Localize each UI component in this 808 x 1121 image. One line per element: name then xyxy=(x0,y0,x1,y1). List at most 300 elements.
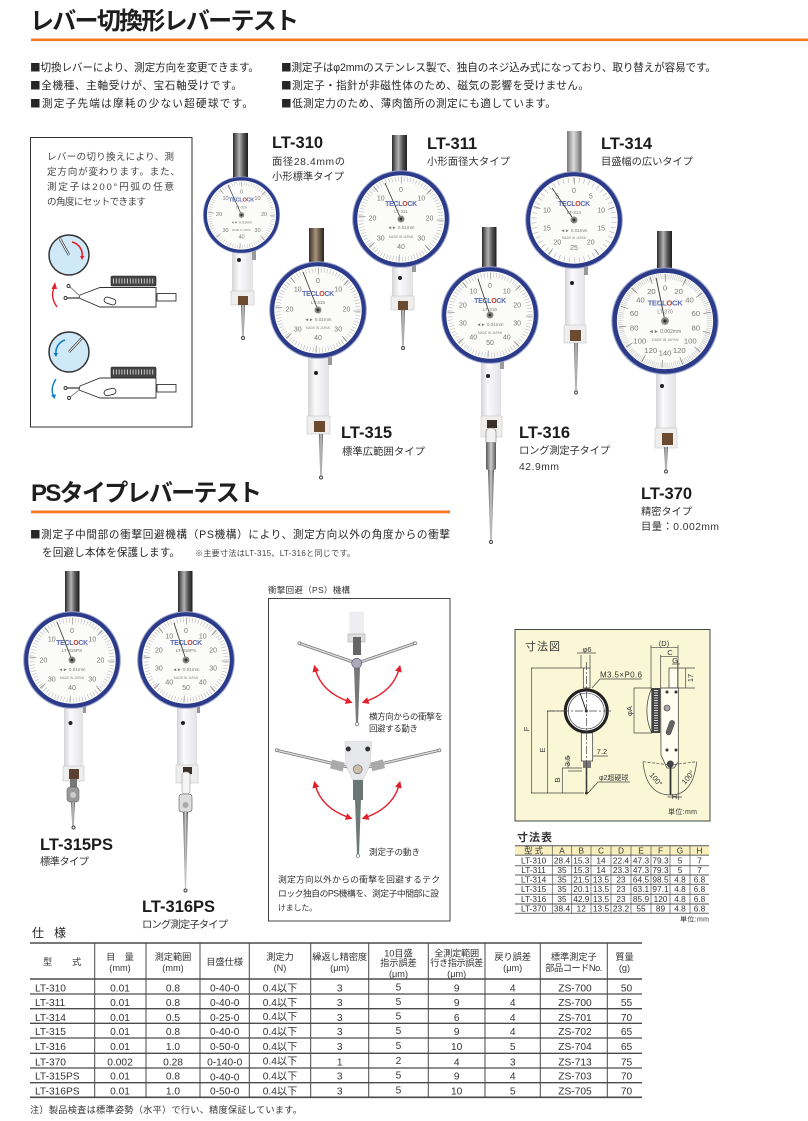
table rows: 0.4以下 xyxy=(263,1072,297,1082)
label: LT-314: LT-314 xyxy=(601,135,653,153)
gauge: LT-315: 10 xyxy=(334,286,342,293)
table: dimensions: 23 xyxy=(616,884,626,894)
drawing: front view: 7.2 xyxy=(597,747,607,756)
table: dimensions: 6.8 xyxy=(694,884,706,894)
gauge: LT-316PS: 20 xyxy=(155,648,163,655)
table: dimensions: 4.8 xyxy=(674,903,686,913)
table: dimensions: 型 式 xyxy=(524,846,544,856)
table rows: 5 xyxy=(396,1086,402,1096)
gauge: LT-370: 20 xyxy=(647,287,656,296)
gauge: LT-314: 25 xyxy=(570,245,578,252)
table rows: 1 xyxy=(337,1058,343,1068)
icon: side view gauge with upward lever xyxy=(52,276,176,307)
gauge: LT-316: 0 xyxy=(488,283,492,290)
gauge: LT-311: 40 xyxy=(397,244,405,251)
gauge: LT-316: 40 xyxy=(469,335,477,342)
table rows: 3 xyxy=(337,1027,343,1038)
table: dimensions: 47.3 xyxy=(633,865,649,875)
table: dimensions: 23.3 xyxy=(613,865,629,875)
table: dimensions: G xyxy=(677,846,683,856)
label: LT-316: LT-316 xyxy=(519,424,570,442)
table header: (mm) xyxy=(162,963,184,973)
gauge: LT-315PS: 30 xyxy=(88,677,96,684)
drawing: front view: E xyxy=(538,747,547,753)
table rows: 3 xyxy=(510,1058,516,1068)
table rows: 4 xyxy=(510,984,516,994)
gauge: LT-311: 0 xyxy=(399,187,403,194)
table rows: 0.5 xyxy=(166,1013,180,1024)
table rows: 0.8 xyxy=(166,1027,180,1038)
heading: PS type lever test: PSタイプレバーテスト xyxy=(31,480,262,507)
label: LT-315 xyxy=(341,424,426,458)
gauge: LT-311: MADE IN JAPAN xyxy=(389,235,414,239)
label: LT-310: 小形標準タイプ xyxy=(272,170,345,183)
table: dimensions: 89 xyxy=(656,903,665,913)
gauge: LT-311: TECLOCK xyxy=(385,201,417,208)
unit note: 単位:mm xyxy=(680,914,709,924)
table header: 指示誤差 xyxy=(380,957,417,968)
gauge: LT-316: 30 xyxy=(513,320,521,327)
gauge: LT-316: TECLOCK xyxy=(474,298,506,305)
gauge: LT-370: LT-370 xyxy=(657,309,673,315)
table rows: 0-140-0 xyxy=(207,1058,243,1068)
table header: 10目盛 xyxy=(384,948,413,958)
gauge: LT-311: 20 xyxy=(369,216,376,222)
feature bullets: ■測定子先端は摩耗の少ない超硬球です。 xyxy=(30,96,253,111)
icon: side view gauge with downward lever xyxy=(51,367,176,400)
table rows: 6 xyxy=(454,1013,460,1024)
table: dimensions: 4.8 xyxy=(674,894,686,904)
table rows: 0.01 xyxy=(110,1013,130,1024)
table rows: 0.002 xyxy=(107,1058,133,1068)
table: dimensions: F xyxy=(658,846,663,856)
table: dimensions: 7 xyxy=(697,865,702,875)
gauge: LT-370: 0 xyxy=(663,284,667,293)
table rows: 70 xyxy=(621,1072,632,1082)
drawing: side view: 100° xyxy=(647,771,664,788)
table rows: ZS-713 xyxy=(558,1058,592,1068)
table rows: 0.01 xyxy=(110,1042,130,1053)
gauge: LT-316PS: ◄► 0.01mm xyxy=(173,667,200,672)
gauge: LT-314: 20 xyxy=(587,240,595,247)
table: dimensions: 5 xyxy=(678,855,683,865)
table rows: 5 xyxy=(396,1012,402,1022)
table: dimensions: 47.3 xyxy=(633,855,649,865)
gauge: LT-310: 10 xyxy=(222,196,229,202)
table: dimensions: 4.8 xyxy=(674,884,686,894)
gauge: LT-316PS: LT-316PS xyxy=(176,648,196,653)
table rows: 50 xyxy=(621,984,632,994)
table rows: 9 xyxy=(454,984,460,994)
gauge: LT-310: 30 xyxy=(254,228,261,234)
table rows: 55 xyxy=(621,998,632,1009)
table: dimensions: 97.1 xyxy=(652,884,669,894)
panel text: 定方向が変わります。また、 xyxy=(47,166,180,178)
text: PS mechanism description: 測定方向以外からの衝撃を回避するテク xyxy=(278,874,440,884)
gauge: LT-370: 120 xyxy=(644,346,657,355)
drawing: front view: 3.5 xyxy=(563,756,572,766)
gauge: LT-314: 10 xyxy=(597,208,605,215)
gauge: LT-316: 10 xyxy=(469,288,477,295)
gauge: LT-311: ◄► 0.01mm xyxy=(388,225,415,230)
gauge: LT-316: 10 xyxy=(503,288,511,295)
table rows: LT-311 xyxy=(35,998,66,1009)
gauge: LT-370: 60 xyxy=(630,309,638,318)
drawing: side view: 100° xyxy=(680,769,697,786)
table: dimensions: B xyxy=(579,846,585,856)
gauge: LT-315PS: TECLOCK xyxy=(56,640,88,647)
gauge: LT-370: ◄► 0.002mm xyxy=(649,329,681,335)
drawing: side view xyxy=(625,639,697,801)
table rows: 0-40-0 xyxy=(210,998,240,1009)
gauge: LT-315PS: 10 xyxy=(48,636,56,643)
table: dimensions: 14 xyxy=(596,855,606,865)
gauge: LT-310: LT-310 xyxy=(236,206,247,210)
label: LT-370: LT-370 xyxy=(641,485,692,503)
table rows: 3 xyxy=(337,1013,343,1024)
gauge: LT-370 xyxy=(612,231,718,473)
label: LT-316: ロング測定子タイプ xyxy=(519,444,611,457)
title: lever type test indicator: レバー切換形レバーテスト xyxy=(30,8,299,35)
gauge: LT-315: 30 xyxy=(334,327,342,334)
table rows: 5 xyxy=(396,982,402,994)
gauge: LT-310: MADE IN JAPAN xyxy=(232,229,251,232)
gauge: LT-315: 20 xyxy=(286,306,293,314)
gauge: LT-311: LT-311 xyxy=(394,209,408,214)
gauge: LT-314: 5 xyxy=(589,193,593,200)
table rows: 3 xyxy=(337,1072,343,1082)
table rows: 75 xyxy=(621,1058,632,1068)
table rows: 65 xyxy=(621,1042,632,1053)
table: dimensions: 13.5 xyxy=(593,874,609,884)
gauge: LT-310: 20 xyxy=(261,212,267,218)
table header xyxy=(43,948,634,979)
table rows: 0-40-0 xyxy=(210,984,240,994)
caption: PS mechanism: 衝撃回避（PS）機構 xyxy=(268,585,350,595)
table rows: 70 xyxy=(621,1013,632,1024)
table: dimensions: 22.4 xyxy=(613,855,629,865)
text: lateral impact caption: 横方向からの衝撃を xyxy=(369,712,443,722)
gauge: LT-316 xyxy=(442,227,538,544)
table rows: 0.01 xyxy=(110,1072,130,1082)
heading: dimension table: 寸法表 xyxy=(517,830,552,844)
table rows: LT-310 xyxy=(35,984,66,994)
drawing: side view: 17 xyxy=(686,674,695,682)
table header: 質量 xyxy=(615,951,634,962)
table rows: 0.8 xyxy=(166,998,180,1009)
label: LT-316 xyxy=(519,424,611,473)
label: LT-315PS xyxy=(40,836,113,868)
table: dimensions: 13.5 xyxy=(593,894,609,904)
table: dimensions: 4.8 xyxy=(674,874,686,884)
drawing: side view: G xyxy=(672,656,678,665)
label: LT-315: LT-315 xyxy=(341,424,392,442)
gauge: LT-370: 140 xyxy=(659,348,671,357)
table rows: 70 xyxy=(621,1086,632,1098)
heading: specifications: 仕 様 xyxy=(32,926,66,940)
table rows: LT-315PS xyxy=(35,1072,80,1082)
table rows: 3 xyxy=(337,984,343,994)
table: dimensions: 12 xyxy=(577,903,586,913)
table rows: 5 xyxy=(510,1042,516,1053)
table rows: 0-25-0 xyxy=(210,1013,240,1024)
gauge: LT-370: 80 xyxy=(630,324,638,333)
gauge: LT-370: TECLOCK xyxy=(648,299,683,308)
gauge: LT-314: TECLOCK xyxy=(558,201,590,208)
gauge: LT-316PS: 20 xyxy=(209,648,217,655)
label: LT-370: 精密タイプ xyxy=(641,505,693,518)
drawing: side view: C xyxy=(667,648,673,657)
panel text: 測定子は200°円弧の任意 xyxy=(47,181,174,193)
table header: (μm) xyxy=(330,963,349,973)
table rows: ZS-700 xyxy=(558,984,592,994)
table header: 行き指示誤差 xyxy=(430,957,483,968)
table: dimensions: 120 xyxy=(654,894,668,904)
table header: 測定範囲 xyxy=(155,951,191,962)
gauge: LT-310: 10 xyxy=(254,196,261,202)
drawing: front view: F xyxy=(522,726,531,731)
table rows: 0-40-0 xyxy=(210,1072,240,1084)
table: dimensions: 5 xyxy=(678,865,683,875)
footnote: 注）製品検査は標準姿勢（水平）で行い、精度保証しています。 xyxy=(30,1104,302,1115)
table: dimensions xyxy=(515,846,709,913)
gauge: LT-314: 15 xyxy=(597,225,605,232)
drawing: side view: H xyxy=(672,792,677,801)
text: lateral impact caption: 回避する動き xyxy=(369,724,418,734)
table: dimensions: 79.3 xyxy=(652,855,669,865)
table rows: 0-50-0 xyxy=(210,1042,240,1053)
feature bullets: ■全機種、主軸受けが、宝石軸受けです。 xyxy=(30,78,242,93)
table rows: 0.01 xyxy=(110,998,130,1009)
table: dimensions: 85.9 xyxy=(633,894,649,904)
text: lateral impact caption xyxy=(369,712,443,734)
table: dimensions: D xyxy=(618,846,624,856)
table: dimensions: H xyxy=(696,846,702,856)
table header: 戻り誤差 xyxy=(494,951,531,962)
icon: dial counter-clockwise xyxy=(49,332,89,372)
table rows: 4 xyxy=(510,998,516,1009)
table: dimensions: 6.8 xyxy=(694,874,706,884)
unit note: 単位:mm xyxy=(668,807,697,816)
gauge: LT-314: MADE IN JAPAN xyxy=(562,236,587,240)
table rows: ZS-701 xyxy=(558,1013,592,1024)
table: dimensions: LT-370 xyxy=(521,903,547,913)
label: LT-370: 目量：0.002mm xyxy=(641,521,719,533)
table rows: 10 xyxy=(451,1086,463,1098)
table rows: 0.4以下 xyxy=(263,1086,297,1098)
table header: (μm) xyxy=(389,969,408,979)
table rows: 1.0 xyxy=(166,1042,180,1053)
gauge: LT-316PS: 30 xyxy=(155,665,163,672)
table: dimensions: 23 xyxy=(616,894,626,904)
gauge: LT-315: 0 xyxy=(316,278,320,285)
table rows: 0.4以下 xyxy=(263,1027,297,1038)
PS feature text: ※主要寸法はLT-315、LT-316と同じです。 xyxy=(195,548,355,558)
gauge: LT-315PS: 30 xyxy=(48,677,56,684)
panel text xyxy=(47,151,180,208)
gauge: LT-316: LT-316 xyxy=(483,307,497,312)
PS feature text: を回避し本体を保護します。 xyxy=(42,546,180,559)
table rows: LT-370 xyxy=(35,1058,66,1068)
table: dimensions: A xyxy=(559,846,565,856)
gauge: LT-311: 30 xyxy=(377,236,385,243)
table: dimensions: 13.5 xyxy=(593,884,609,894)
gauge: LT-314: 5 xyxy=(555,193,559,200)
table header: (μm) xyxy=(503,963,522,973)
drawing: front view: φ2超硬球 xyxy=(599,773,628,782)
gauge: LT-315: LT-315 xyxy=(311,300,325,305)
gauge: LT-316PS: 40 xyxy=(165,680,173,687)
table rows: 3 xyxy=(337,1042,343,1053)
table rows: 0.8 xyxy=(166,984,180,994)
table rows: LT-314 xyxy=(35,1013,66,1024)
gauge: LT-314: 10 xyxy=(543,208,551,215)
table rows: 9 xyxy=(454,1072,460,1082)
table rows: 4 xyxy=(510,1013,516,1024)
panel text: レバーの切り換えにより、測 xyxy=(47,151,174,163)
gauge: LT-316: 20 xyxy=(513,303,521,310)
gauge: LT-310: ◄► 0.01mm xyxy=(231,221,252,225)
table rows: 0.8 xyxy=(166,1072,180,1082)
table rows: 0.01 xyxy=(110,1027,130,1038)
icon: dial clockwise xyxy=(49,235,89,275)
table rows: 5 xyxy=(396,1026,402,1037)
label: LT-315: 標準広範囲タイプ xyxy=(342,445,426,458)
table: dimensions: 42.9 xyxy=(573,894,590,904)
table: dimensions: 35 xyxy=(557,865,567,875)
gauge: LT-315PS: LT-315PS xyxy=(62,648,82,653)
gauge: LT-370: 80 xyxy=(692,324,700,333)
gauge: LT-316PS: 10 xyxy=(199,633,207,640)
table rows: ZS-700 xyxy=(558,998,592,1009)
label: LT-370 xyxy=(641,485,719,533)
text: probe movement caption: 測定子の動き xyxy=(369,847,420,857)
panel text: の角度にセットできます xyxy=(47,196,146,208)
label: LT-315PS: LT-315PS xyxy=(40,836,113,854)
gauge: LT-370: 40 xyxy=(685,296,694,305)
gauge: LT-310: TECLOCK xyxy=(229,198,254,204)
gauge: LT-315 xyxy=(270,228,366,479)
gauge: LT-314: 20 xyxy=(553,240,561,247)
label: LT-310: 面径28.4mmの xyxy=(272,155,345,168)
label: LT-311: LT-311 xyxy=(427,135,477,153)
feature bullets: ■低測定力のため、薄肉箇所の測定にも適しています。 xyxy=(281,96,556,111)
table: dimensions: 35 xyxy=(557,884,567,894)
gauge: LT-315PS: 20 xyxy=(97,658,104,664)
table rows: ZS-703 xyxy=(558,1072,592,1082)
gauge: LT-316PS: 0 xyxy=(184,628,188,635)
gauge: LT-370: 120 xyxy=(673,346,686,355)
table rows: 0.4以下 xyxy=(263,984,297,994)
label: LT-314 xyxy=(601,135,694,168)
table: dimensions: 35 xyxy=(557,894,567,904)
PS feature text xyxy=(30,527,450,559)
gauge: LT-315: 40 xyxy=(314,335,322,342)
table rows: 0-40-0 xyxy=(210,1027,240,1038)
feature bullets: ■測定子・指針が非磁性体のため、磁気の影響を受けません。 xyxy=(281,78,589,93)
gauge: LT-316PS: TECLOCK xyxy=(170,640,202,647)
table: dimensions: LT-316 xyxy=(521,894,547,904)
gauge: LT-370: 60 xyxy=(692,309,700,318)
label: LT-315PS: 標準タイプ xyxy=(40,855,90,868)
table rows: LT-315 xyxy=(35,1027,66,1038)
table rows: 0.4以下 xyxy=(263,1056,297,1068)
table: dimensions: 64.5 xyxy=(633,874,649,884)
table rows: 0.4以下 xyxy=(263,1042,297,1053)
gauge: LT-315: ◄► 0.01mm xyxy=(305,317,332,322)
feature bullets: ■切換レバーにより、測定方向を変更できます。 xyxy=(30,60,259,75)
table: dimensions: 14 xyxy=(596,865,606,875)
table rows xyxy=(35,982,632,1098)
gauge: LT-315: TECLOCK xyxy=(302,291,334,298)
table header: 部品コードNo. xyxy=(545,963,602,973)
panel: lever switching explanation xyxy=(30,138,192,427)
table: dimensions: 6.8 xyxy=(694,903,706,913)
table: dimensions: 6.8 xyxy=(694,894,706,904)
table header: 型 xyxy=(43,957,52,967)
gauge: LT-316PS: 50 xyxy=(182,685,190,692)
gauge: LT-315PS: 10 xyxy=(88,636,96,643)
gauge: LT-314: 0 xyxy=(572,188,576,195)
table: dimensions: 63.1 xyxy=(633,884,649,894)
table: dimensions: 7 xyxy=(697,855,702,865)
table rows: LT-316 xyxy=(35,1042,66,1053)
gauge: LT-310: 0 xyxy=(240,189,243,195)
gauge: LT-314: 15 xyxy=(543,225,551,232)
gauge: LT-315PS: 20 xyxy=(40,658,47,664)
table header: (N) xyxy=(274,963,286,973)
table rows: 0.4以下 xyxy=(263,998,297,1009)
table: dimensions: 28.4 xyxy=(554,855,570,865)
table: dimensions: 20.1 xyxy=(573,884,590,894)
gauge: LT-370: 20 xyxy=(674,287,683,296)
table: dimensions: LT-310 xyxy=(521,855,547,865)
table rows: ZS-705 xyxy=(558,1086,592,1098)
table header: (mm) xyxy=(109,963,131,973)
table: dimensions: 79.3 xyxy=(652,865,669,875)
gauge: LT-316PS: MADE IN JAPAN xyxy=(174,676,199,680)
label: LT-316PS: ロング測定子タイプ xyxy=(142,918,229,931)
gauge: LT-311: 10 xyxy=(417,195,425,202)
label: LT-314: 目盛幅の広いタイプ xyxy=(601,155,694,168)
table rows: 4 xyxy=(510,1072,516,1082)
table: dimensions: 15.3 xyxy=(573,865,590,875)
drawing: side view: φA xyxy=(625,706,634,716)
table: dimensions: LT-314 xyxy=(521,874,547,884)
table rows: 5 xyxy=(396,1070,402,1082)
table: dimensions: 23.2 xyxy=(613,903,629,913)
table rows: 0.28 xyxy=(163,1058,183,1068)
table: dimensions: 38.4 xyxy=(554,903,570,913)
label: LT-311: 小形面径大タイプ xyxy=(427,155,511,168)
table: dimensions: LT-311 xyxy=(521,865,546,875)
gauge: LT-316: 30 xyxy=(459,320,467,327)
table rows: 0.4以下 xyxy=(263,1012,297,1023)
gauge: LT-314 xyxy=(526,131,622,394)
table: dimensions: 35 xyxy=(557,874,567,884)
gauge: LT-370: 40 xyxy=(636,296,645,305)
table rows: 4 xyxy=(510,1027,516,1038)
table rows: 4 xyxy=(454,1058,460,1068)
table: dimensions: C xyxy=(598,846,604,856)
gauge: LT-315PS: MADE IN JAPAN xyxy=(60,676,85,680)
drawing: front view: B xyxy=(553,777,562,783)
gauge: LT-311: 20 xyxy=(426,216,433,222)
table rows: LT-316PS xyxy=(35,1086,80,1098)
gauge: LT-316: 40 xyxy=(503,335,511,342)
label: LT-316PS xyxy=(142,898,229,931)
gauge: LT-315: MADE IN JAPAN xyxy=(306,326,331,330)
